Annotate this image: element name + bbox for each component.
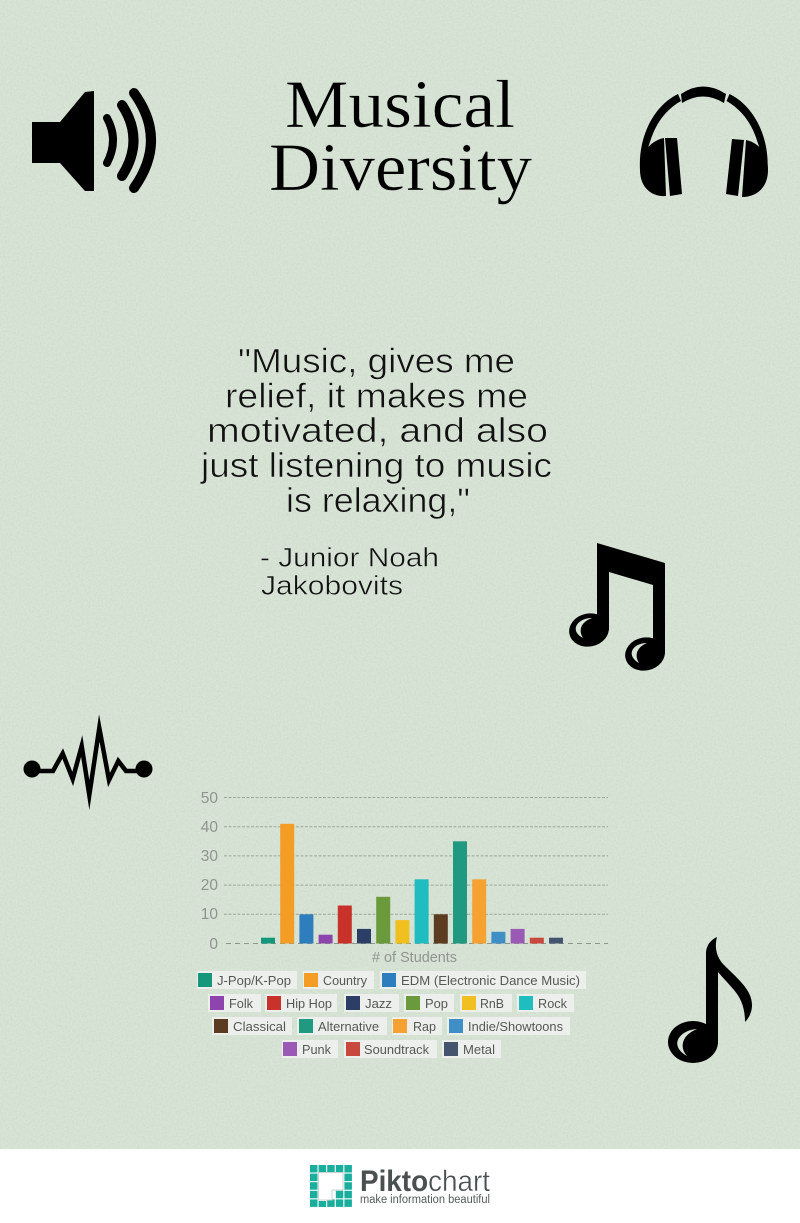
bar chart — [201, 790, 608, 966]
quote attribution: - Junior Noah — [260, 542, 439, 572]
icon: headphones — [640, 86, 768, 197]
title: Musical — [285, 66, 515, 142]
quote — [200, 342, 552, 520]
quote attribution: Jakobovits — [261, 570, 403, 600]
chart legend: Rap — [413, 1019, 436, 1034]
icon: single music note — [668, 937, 752, 1063]
quote: relief, it makes me — [225, 378, 528, 416]
chart legend — [197, 971, 586, 1058]
chart legend: Indie/Showtoons — [468, 1019, 563, 1034]
footer band — [0, 1149, 800, 1223]
chart legend: Punk — [302, 1042, 331, 1057]
chart legend: Pop — [425, 996, 448, 1011]
title — [269, 66, 532, 205]
quote attribution — [260, 542, 439, 600]
quote: "Music, gives me — [238, 342, 515, 380]
icon: speaker — [32, 91, 151, 191]
icon: sound pulse — [24, 728, 152, 795]
chart legend: Jazz — [365, 996, 392, 1011]
chart legend: Hip Hop — [286, 996, 332, 1011]
axis title: # of Students — [372, 950, 457, 966]
chart legend: Alternative — [318, 1019, 379, 1034]
quote: is relaxing," — [286, 482, 470, 520]
y axis labels: 10 — [201, 906, 218, 923]
y axis labels — [201, 790, 218, 953]
chart legend: EDM (Electronic Dance Music) — [401, 973, 580, 988]
icon: beamed music notes — [566, 543, 668, 674]
chart legend: Soundtrack — [364, 1042, 429, 1057]
title: Diversity — [269, 129, 532, 205]
chart legend: Metal — [463, 1042, 495, 1057]
chart legend: Rock — [538, 996, 567, 1011]
piktochart tagline: make information beautiful — [360, 1194, 490, 1206]
piktochart wordmark: Piktochart — [360, 1165, 491, 1198]
y axis labels: 0 — [209, 936, 218, 953]
chart legend: Classical — [233, 1019, 286, 1034]
chart legend: RnB — [480, 996, 504, 1011]
y axis labels: 50 — [201, 790, 218, 807]
quote: just listening to music — [200, 447, 552, 485]
y axis labels: 40 — [201, 819, 218, 836]
quote: motivated, and also — [207, 412, 548, 450]
y axis labels: 20 — [201, 877, 218, 894]
bars — [261, 824, 563, 944]
piktochart logo mark — [310, 1165, 352, 1207]
chart legend: Country — [323, 973, 367, 988]
chart legend: Folk — [229, 996, 253, 1011]
y axis labels: 30 — [201, 848, 218, 865]
chart legend: J-Pop/K-Pop — [217, 973, 291, 988]
